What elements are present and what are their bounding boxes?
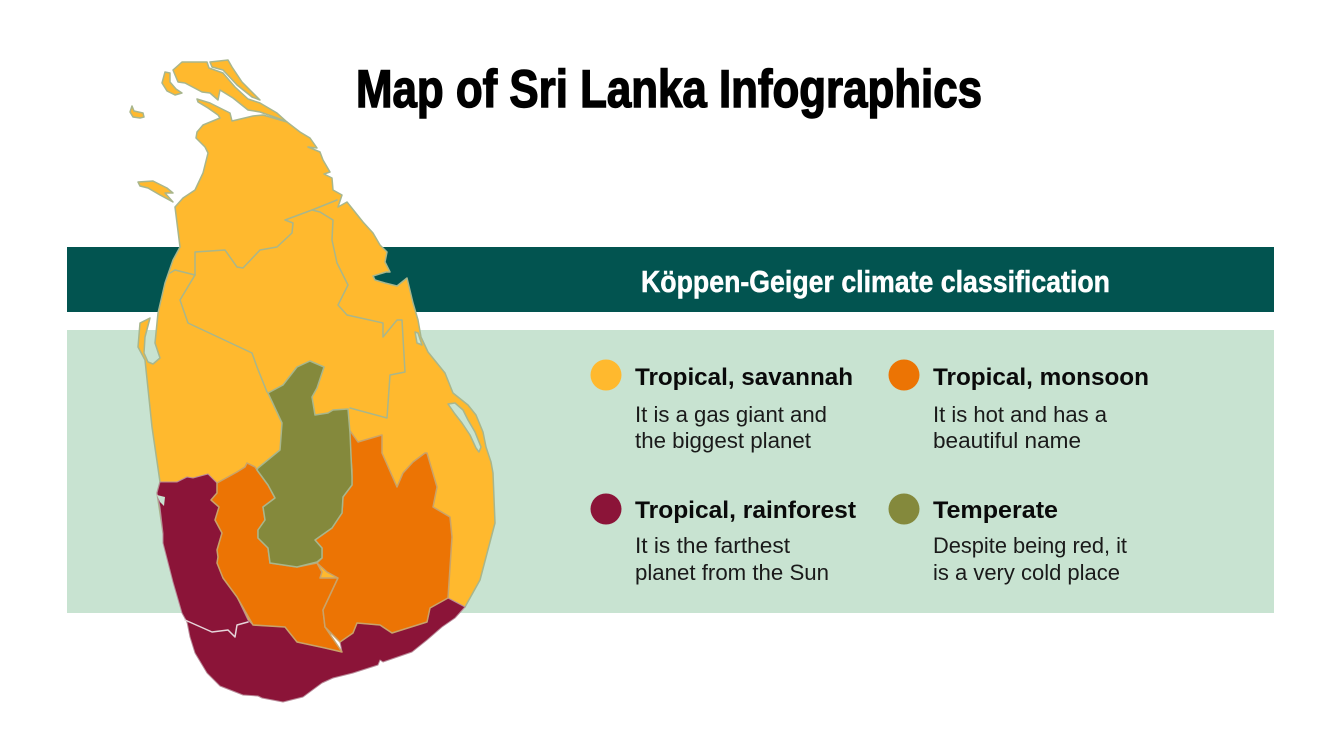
heading: temperate: Temperate (933, 497, 1058, 524)
map: eastern lagoons (415, 332, 481, 452)
text: monsoon description (933, 402, 1108, 453)
map: tropical monsoon region (west) (211, 463, 342, 652)
legend item: tropical monsoon (888, 360, 1149, 453)
icon: monsoon dot (888, 360, 920, 390)
text: monsoon description: beautiful name (933, 428, 1081, 453)
legend item: tropical savannah (590, 360, 853, 453)
text: temperate description: is a very cold place (933, 560, 1120, 585)
text: temperate description: Despite being red, it (933, 533, 1127, 558)
icon: temperate dot (888, 494, 920, 524)
map: rainforest internal border (185, 620, 248, 637)
map: temperate region (257, 361, 352, 567)
text: rainforest description: planet from the Sun (635, 560, 829, 585)
map: west coast inlet (157, 495, 165, 506)
title: Map of Sri Lanka Infographics (356, 60, 982, 119)
text: monsoon description: It is hot and has a (933, 402, 1108, 427)
heading: monsoon: Tropical, monsoon (933, 364, 1149, 391)
text: rainforest description: It is the farthest (635, 533, 790, 558)
legend item: temperate (888, 494, 1127, 585)
map: northern islands and peninsula (130, 60, 287, 202)
banner: dark green band (67, 247, 1274, 312)
banner heading: Köppen-Geiger climate classification (641, 264, 1110, 299)
map: tropical rainforest region (157, 474, 465, 702)
map: tropical savannah region (mainland) (138, 99, 495, 640)
text: savannah description: the biggest planet (635, 428, 811, 453)
text: savannah description: It is a gas giant and (635, 402, 827, 427)
panel: mint legend background (67, 330, 1274, 613)
map of Sri Lanka (130, 60, 495, 702)
icon: rainforest dot (590, 494, 622, 524)
legend item: tropical rainforest (590, 494, 856, 585)
text: savannah description (635, 402, 827, 453)
text: rainforest description (635, 533, 829, 585)
text: temperate description (933, 533, 1127, 585)
icon: savannah dot (590, 360, 622, 390)
map: tropical monsoon region (east) (315, 428, 452, 642)
heading: savannah: Tropical, savannah (635, 364, 853, 391)
heading: rainforest: Tropical, rainforest (635, 497, 856, 524)
map: savannah internal borders (170, 200, 405, 418)
